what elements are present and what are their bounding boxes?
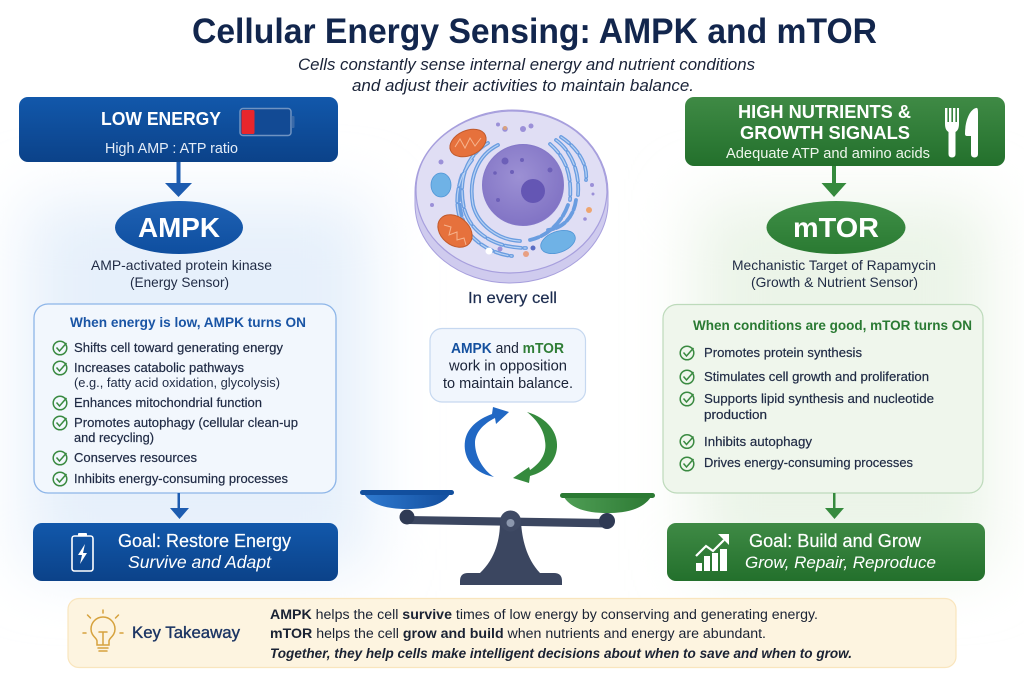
callout: AMPK and mTOR bbox=[451, 341, 564, 357]
endoplasmic reticulum bbox=[457, 137, 586, 256]
arrow: blue cycle bbox=[465, 407, 509, 477]
panel: AMPK goal: Goal: Restore Energy bbox=[118, 530, 292, 551]
arrow: AMPK panel to goal bbox=[170, 493, 189, 519]
panel: high nutrients header: HIGH NUTRIENTS & bbox=[738, 102, 911, 122]
AMPK list text: Shifts cell toward generating energy bbox=[74, 340, 283, 355]
panel: low energy header bbox=[19, 97, 338, 162]
mTOR description: Mechanistic Target of Rapamycin bbox=[732, 258, 936, 273]
AMPK list text: Enhances mitochondrial function bbox=[74, 395, 262, 410]
subtitle bbox=[298, 56, 755, 95]
mTOR oval: mTOR bbox=[793, 212, 879, 243]
AMPK description bbox=[91, 258, 272, 290]
icon: charging battery bbox=[72, 533, 93, 571]
background glows bbox=[25, 200, 990, 570]
panel: low energy header: LOW ENERGY bbox=[101, 109, 221, 129]
panel: AMPK actions bbox=[34, 304, 336, 493]
panel: AMPK goal: Survive and Adapt bbox=[128, 552, 272, 572]
callout: work in opposition bbox=[448, 358, 567, 374]
mTOR list text: Inhibits autophagy bbox=[704, 434, 813, 449]
illustration: balance scale bbox=[360, 490, 655, 585]
AMPK oval bbox=[115, 201, 243, 254]
AMPK panel heading: When energy is low, AMPK turns ON bbox=[70, 315, 306, 330]
nucleus bbox=[482, 144, 564, 226]
arrow: green cycle bbox=[513, 412, 557, 483]
AMPK list text: (e.g., fatty acid oxidation, glycolysis) bbox=[74, 375, 280, 390]
left pan bbox=[360, 490, 454, 509]
illustration: cell bbox=[415, 110, 608, 283]
stand bbox=[460, 522, 562, 585]
mTOR list text: Stimulates cell growth and proliferation bbox=[704, 369, 929, 384]
cell caption: In every cell bbox=[468, 290, 557, 307]
callout: to maintain balance. bbox=[443, 376, 573, 392]
panel: mTOR goal bbox=[667, 523, 985, 581]
panel: low energy header: High AMP : ATP ratio bbox=[105, 141, 238, 157]
subtitle: and adjust their activities to maintain balance. bbox=[352, 77, 694, 95]
mitochondria bbox=[431, 124, 490, 254]
AMPK list text: Conserves resources bbox=[74, 450, 197, 465]
mTOR list text: Drives energy-consuming processes bbox=[704, 455, 913, 470]
key takeaway text: mTOR helps the cell grow and build when nutrients and energy are abundant. bbox=[270, 626, 766, 641]
mTOR check icons bbox=[680, 346, 694, 471]
panel: mTOR actions bbox=[663, 304, 983, 493]
AMPK list text: Promotes autophagy (cellular clean-up bbox=[74, 415, 298, 430]
subtitle: Cells constantly sense internal energy and nutrient conditions bbox=[298, 56, 755, 74]
panel: mTOR goal: Goal: Build and Grow bbox=[749, 530, 922, 551]
panel: high nutrients header: GROWTH SIGNALS bbox=[740, 123, 910, 143]
panel: high nutrients header bbox=[685, 97, 1005, 166]
AMPK list text: Increases catabolic pathways bbox=[74, 360, 245, 375]
key takeaway text: Together, they help cells make intelligent decisions about when to save and when to grow. bbox=[270, 646, 852, 661]
AMPK description: AMP-activated protein kinase bbox=[91, 258, 272, 273]
panel: AMPK goal bbox=[33, 523, 338, 581]
callout bbox=[430, 328, 586, 402]
icon: growth chart bbox=[696, 534, 729, 571]
panel: high nutrients header: Adequate ATP and amino acids bbox=[726, 146, 930, 162]
icon: low battery bbox=[240, 108, 294, 136]
mTOR list text: Promotes protein synthesis bbox=[704, 345, 863, 360]
AMPK list text: and recycling) bbox=[74, 430, 154, 445]
mTOR list text: production bbox=[704, 407, 767, 422]
panel: key takeaway bbox=[68, 598, 956, 668]
mTOR list text bbox=[704, 345, 934, 470]
mTOR list text: Supports lipid synthesis and nucleotide bbox=[704, 391, 934, 406]
mTOR description: (Growth & Nutrient Sensor) bbox=[751, 275, 918, 290]
small vesicles bbox=[430, 122, 594, 257]
key takeaway text bbox=[270, 607, 852, 661]
AMPK list text: Inhibits energy-consuming processes bbox=[74, 471, 288, 486]
title: Cellular Energy Sensing: AMPK and mTOR bbox=[192, 12, 877, 51]
arrow: high nutrients to mTOR bbox=[822, 166, 846, 197]
AMPK oval: AMPK bbox=[138, 212, 220, 243]
AMPK list text bbox=[74, 340, 298, 486]
right pan bbox=[560, 493, 655, 513]
mTOR description bbox=[732, 258, 936, 290]
beam bbox=[407, 516, 607, 528]
vacuoles bbox=[431, 173, 579, 258]
panel: mTOR goal: Grow, Repair, Reproduce bbox=[745, 553, 936, 572]
mTOR panel heading: When conditions are good, mTOR turns ON bbox=[693, 318, 972, 333]
key takeaway text: AMPK helps the cell survive times of low energy by conserving and generating energy. bbox=[270, 607, 818, 622]
icon: light bulb bbox=[83, 610, 123, 651]
mTOR oval bbox=[766, 201, 906, 254]
icon: fork and knife bbox=[945, 108, 978, 158]
AMPK description: (Energy Sensor) bbox=[130, 275, 229, 290]
arrow: low energy to AMPK bbox=[165, 162, 192, 197]
key takeaway label: Key Takeaway bbox=[132, 624, 241, 642]
AMPK check icons bbox=[53, 341, 67, 486]
arrow: mTOR panel to goal bbox=[825, 493, 844, 519]
